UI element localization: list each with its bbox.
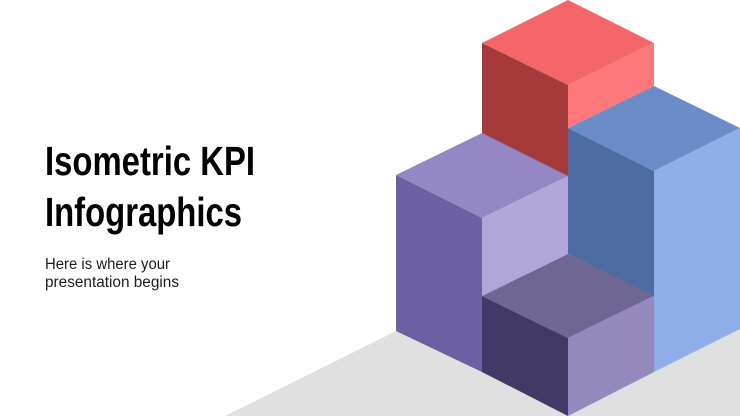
subtitle: presentation begins [45,274,179,291]
subtitle [45,256,179,291]
subtitle: Here is where your [45,256,170,273]
red cube [482,0,654,180]
blue column [568,86,740,372]
title [45,138,255,235]
title: Infographics [45,189,242,235]
floor shadow [225,329,740,416]
purple column [396,133,568,372]
title: Isometric KPI [45,138,255,184]
dark purple low block [482,254,654,416]
